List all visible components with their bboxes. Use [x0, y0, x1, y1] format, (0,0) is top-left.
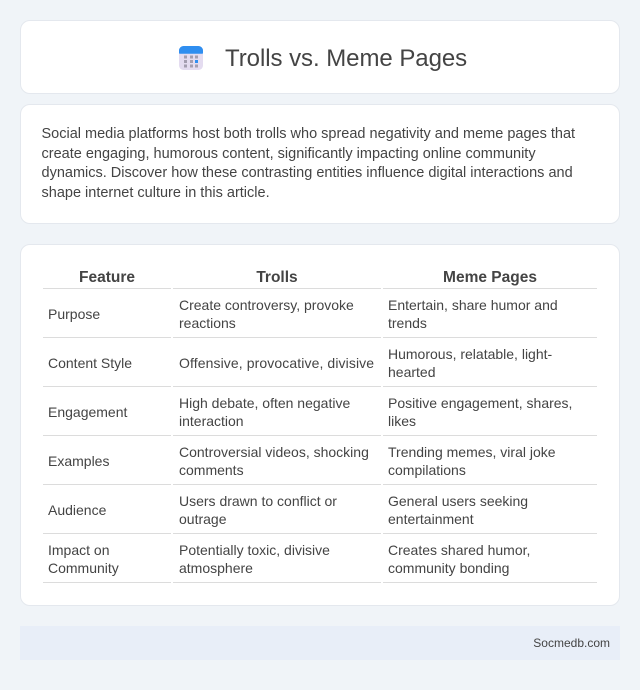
footer bar: [20, 626, 620, 660]
comparison table: Controversial videos, shocking: [179, 444, 369, 460]
row: Engagement: Engagement: [48, 404, 127, 420]
title: Trolls vs. Meme Pages: [225, 45, 467, 72]
intro text: create engaging, humorous content, significantly impacting online community: [42, 146, 536, 162]
row: Impact on Community: Community: [48, 560, 119, 576]
header: Feature: Feature: [79, 269, 135, 286]
title card: [20, 20, 620, 94]
comparison table: General users seeking: [388, 493, 528, 509]
comparison table: Users drawn to conflict or: [179, 493, 337, 509]
comparison table: Offensive, provocative, divisive: [179, 355, 374, 371]
comparison table: Positive engagement, shares,: [388, 395, 572, 411]
intro text: dynamics. Discover how these contrasting entities influence digital interactions and: [42, 165, 573, 181]
comparison table: entertainment: [388, 511, 474, 527]
comparison table: Trending memes, viral joke: [388, 444, 556, 460]
comparison table: trends: [388, 315, 427, 331]
comparison table: outrage: [179, 511, 226, 527]
row: Impact on Community: Impact on: [48, 542, 109, 558]
comparison table: Humorous, relatable, light-: [388, 346, 552, 362]
intro text: [42, 126, 575, 200]
comparison table: hearted: [388, 364, 435, 380]
comparison table: Create controversy, provoke: [179, 297, 354, 313]
header: Trolls: Trolls: [256, 269, 298, 286]
comparison table: interaction: [179, 413, 244, 429]
comparison table: comments: [179, 462, 244, 478]
icon: calendar: [179, 46, 203, 70]
row: Purpose: Purpose: [48, 306, 100, 322]
comparison table: likes: [388, 413, 416, 429]
comparison table: High debate, often negative: [179, 395, 350, 411]
table card: [20, 244, 620, 606]
row: Examples: Examples: [48, 453, 109, 469]
comparison table: reactions: [179, 315, 236, 331]
comparison table: atmosphere: [179, 560, 253, 576]
intro text: shape internet culture in this article.: [42, 184, 270, 200]
intro card: [20, 104, 620, 224]
row: Content Style: Content Style: [48, 355, 132, 371]
footer text: Socmedb.com: [533, 636, 610, 650]
intro text: Social media platforms host both trolls who spread negativity and meme pages that: [42, 126, 575, 142]
row: Audience: Audience: [48, 502, 106, 518]
comparison table: community bonding: [388, 560, 509, 576]
comparison table: compilations: [388, 462, 466, 478]
comparison table: Creates shared humor,: [388, 542, 530, 558]
header: Meme Pages: Meme Pages: [443, 269, 537, 286]
row: Impact on Community: [48, 542, 119, 576]
comparison table: Potentially toxic, divisive: [179, 542, 330, 558]
comparison table: Entertain, share humor and: [388, 297, 558, 313]
